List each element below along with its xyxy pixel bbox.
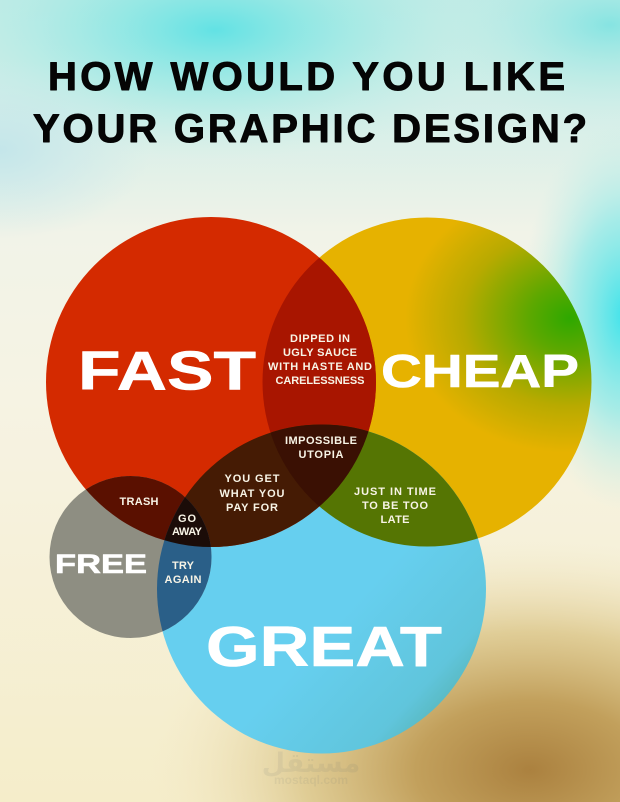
text: you get what you pay for: YOU GET (224, 473, 280, 485)
venn diagram (46, 217, 592, 754)
overlap: free and fast (86, 476, 185, 540)
title (33, 55, 587, 151)
title: YOUR GRAPHIC DESIGN? (33, 107, 587, 151)
overlap: free and great (157, 497, 212, 632)
text: just in time: LATE (380, 514, 410, 526)
label: CHEAP: CHEAP (381, 345, 579, 397)
circle: cheap (262, 218, 592, 546)
circle: free (50, 476, 212, 638)
text: try again (164, 560, 202, 586)
overlap: fast and great (185, 424, 368, 547)
text: impossible utopia (285, 435, 357, 461)
circle: fast (46, 217, 376, 547)
text: go away: GO (178, 513, 196, 525)
text: dipped in ugly sauce: UGLY SAUCE (283, 347, 357, 359)
overlap: fast and cheap (262, 258, 376, 432)
overlap: free, fast and great (164, 497, 211, 547)
text: dipped in ugly sauce (268, 333, 372, 387)
text: just in time (354, 486, 436, 526)
text: dipped in ugly sauce: WITH HASTE AND (268, 361, 372, 373)
text: dipped in ugly sauce: DIPPED IN (290, 333, 350, 345)
text: impossible utopia: IMPOSSIBLE (285, 435, 357, 447)
watermark: مستقل (262, 748, 360, 779)
title: HOW WOULD YOU LIKE (48, 55, 565, 99)
text: go away: AWAY (172, 526, 203, 538)
overlap: fast, cheap and great (270, 424, 368, 506)
text: you get what you pay for (220, 473, 285, 514)
text: you get what you pay for: PAY FOR (226, 502, 278, 514)
text: just in time: TO BE TOO (362, 500, 428, 512)
text: go away (172, 513, 203, 538)
text: dipped in ugly sauce: CARELESSNESS (276, 375, 364, 387)
label: GREAT: GREAT (206, 615, 442, 679)
label: FAST: FAST (78, 340, 256, 402)
text: trash: TRASH (120, 496, 159, 508)
overlap: cheap and great (271, 424, 478, 546)
text: impossible utopia: UTOPIA (298, 449, 344, 461)
text: try again: AGAIN (164, 574, 202, 586)
circle: great (157, 424, 486, 754)
text: just in time: JUST IN TIME (354, 486, 436, 498)
watermark: mostaql.com (274, 773, 348, 787)
text: try again: TRY (172, 560, 195, 572)
label: FREE: FREE (55, 549, 147, 579)
text: you get what you pay for: WHAT YOU (220, 488, 285, 500)
